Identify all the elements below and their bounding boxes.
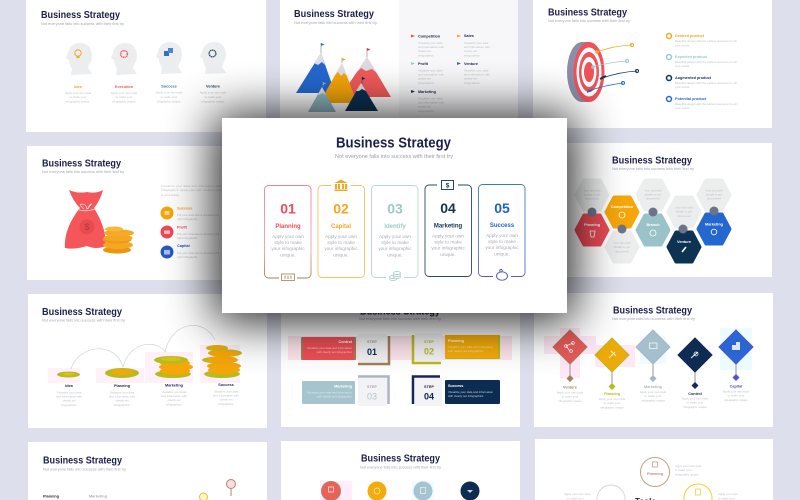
- panel: slide with head icons: [26, 0, 266, 132]
- panel: slide with coin stacks: and information with: [109, 394, 135, 398]
- panel: bottom centre slide: Business Strategy: [361, 454, 440, 464]
- panel: slide with mountains: [280, 0, 518, 118]
- panel: slide with mountains: infographics.: [464, 54, 481, 58]
- main slide drop shadow: [214, 114, 575, 322]
- panel: slide with steps: Visualize your data and information: [307, 346, 352, 350]
- panel: slide with money bag: Success: [177, 206, 192, 210]
- panel: slide with steps: Not everyone falls into success with their first try: [359, 317, 441, 321]
- panel: bottom left slide: [28, 442, 267, 500]
- panel: slide with coin stacks: Visualize your data: [214, 390, 239, 394]
- card: planning: your infographic: [271, 246, 305, 251]
- panel: slide with diamonds: to make your: [728, 394, 744, 398]
- panel: slide with mountains: clearly set: [464, 76, 477, 80]
- panel: slide with mountains: and information with: [418, 45, 444, 49]
- card: planning: Apply your own: [272, 234, 304, 239]
- panel: slide with target: Beautiful design with the perfect elements for all: [675, 81, 737, 85]
- panel: slide with mountains: Profit: [418, 62, 429, 66]
- panel: slide with hexagons: details to get: [676, 210, 692, 214]
- card: capital: Capital: [331, 224, 351, 230]
- panel: slide with target: your needs: [675, 44, 690, 48]
- panel: slide with diamonds: Not everyone falls into success with their first try: [612, 317, 695, 321]
- panel: slide with coin stacks: Visualize your data: [110, 390, 135, 394]
- panel: slide with steps: Marketing: [334, 384, 353, 388]
- panel: slide with mountains: Visualize your data: [418, 68, 443, 72]
- icon: banknote: [282, 274, 294, 280]
- panel: slide with target: your needs: [675, 64, 690, 68]
- panel: slide with hexagons: Business Strategy: [612, 156, 692, 166]
- panel: slide with mountains: Visualize your data: [464, 68, 489, 72]
- panel: slide with diamonds: Apply your own style: [640, 390, 667, 394]
- panel: slide with steps: 04: [424, 392, 434, 402]
- card: planning: [264, 186, 311, 281]
- panel: slide with hexagons: Not everyone falls into success with their first try: [612, 167, 694, 171]
- panel: slide with mountains: infographics.: [418, 81, 435, 85]
- card: planning: Planning: [275, 224, 301, 230]
- panel: slide with target: your needs: [675, 85, 690, 89]
- panel: slide with diamonds: to make your: [687, 400, 703, 404]
- panel: slide with coin stacks: Visualize your data: [57, 390, 82, 394]
- panel: slide with hexagons: discovered: [585, 196, 599, 200]
- panel: slide with coin stacks: infographics.: [61, 403, 77, 407]
- panel: slide with coin stacks: clearly set: [219, 398, 233, 402]
- panel: slide with coin stacks: [28, 294, 267, 428]
- panel: slide with diamonds: Business Strategy: [613, 306, 692, 316]
- panel: slide with head icons: Success: [161, 84, 177, 88]
- panel: slide with coin stacks: Success: [218, 383, 234, 387]
- panel: slide with diamonds: to make your: [645, 394, 661, 398]
- card: marketing: [425, 180, 472, 276]
- panel: slide with head icons: Business Strategy: [41, 10, 120, 21]
- panel: bottom left slide: Not everyone falls into success with their first try: [43, 468, 126, 472]
- card: planning: unique.: [280, 252, 296, 258]
- panel: slide with mountains: Venture: [464, 62, 478, 66]
- panel: slide with hexagons: Competition: [611, 205, 634, 209]
- panel: slide with steps: 01: [367, 347, 377, 357]
- card: planning: style to make: [274, 240, 302, 245]
- icon: dollar sign board: $: [446, 182, 450, 190]
- panel: slide with coin stacks: and information with: [56, 394, 82, 398]
- card: capital: style to make: [327, 240, 355, 245]
- panel: bottom right slide: [535, 439, 773, 500]
- panel: bottom right slide: to make your: [675, 468, 692, 472]
- card: marketing: 04: [440, 200, 456, 216]
- panel: slide with hexagons: details to get: [645, 192, 661, 196]
- panel: slide with target: Augmented product: [675, 76, 712, 80]
- panel: slide with steps: with clearly set infographics: [317, 394, 353, 398]
- panel: slide with hexagons: discovered: [646, 196, 660, 200]
- panel: slide with money bag: Profit: [177, 226, 188, 230]
- panel: slide with steps: Planning: [448, 339, 465, 343]
- panel: slide with head icons: to make your: [161, 95, 177, 99]
- panel: slide with steps: STEP: [367, 385, 377, 389]
- panel: slide with steps: with clearly set infographics: [448, 394, 484, 398]
- card: identify: 03: [387, 200, 403, 216]
- panel: slide with diamonds: Capital: [730, 384, 742, 388]
- panel: slide with coin stacks: Business Strategy: [42, 307, 122, 318]
- panel: slide with target: your needs: [675, 106, 690, 110]
- panel: slide with target: Expected product: [675, 55, 708, 59]
- panel: slide with steps: Visualize your data and information: [448, 345, 493, 349]
- card: planning: 01: [280, 200, 296, 216]
- panel: slide with diamonds: infographic unique: [683, 405, 707, 409]
- panel: slide with steps: STEP: [424, 385, 434, 389]
- panel: main slide: [222, 118, 567, 313]
- panel: slide with mountains: clearly set: [418, 76, 431, 80]
- panel: slide with steps: with clearly set infographics: [317, 350, 353, 354]
- panel: slide with mountains: infographics.: [418, 54, 435, 58]
- panel: slide with coin stacks: Idea: [65, 384, 74, 388]
- panel: slide with coin stacks: infographics.: [166, 402, 182, 406]
- panel: slide with coin stacks: and information with: [213, 394, 239, 398]
- panel: slide with coin stacks: infographics.: [114, 403, 130, 407]
- panel: slide with diamonds: Marketing: [644, 385, 663, 389]
- panel: slide with diamonds: infographic unique: [600, 406, 624, 410]
- panel: slide with mountains: and information with: [464, 45, 490, 49]
- card: success: unique.: [494, 252, 510, 256]
- panel: slide with hexagons: details to get: [614, 245, 630, 249]
- panel: slide with coin stacks: clearly set: [167, 398, 181, 402]
- card: identify: unique.: [387, 252, 403, 258]
- panel: slide with coin stacks: Not everyone falls into success with their first try: [42, 318, 125, 322]
- card: success: [478, 184, 525, 280]
- panel: bottom right slide: Planning: [647, 472, 664, 476]
- panel: slide with money bag: Put your data about choosing the: [177, 213, 220, 217]
- panel: slide with steps: [281, 300, 520, 427]
- panel: slide with head icons: Not everyone falls into success with their first try: [41, 22, 124, 26]
- panel: bottom centre slide: Not everyone falls into success with their first try: [360, 466, 441, 470]
- panel: bottom right slide: infographic unique.: [675, 472, 700, 476]
- panel: slide with hexagons: Planning: [584, 223, 601, 227]
- panel: slide with steps: Control: [338, 340, 352, 344]
- card: identify: [372, 186, 418, 281]
- icon: piggy bank: [496, 270, 508, 280]
- panel: slide with diamonds: Control: [688, 392, 702, 396]
- panel: slide with mountains: and information with: [418, 100, 444, 104]
- panel: slide with coin stacks: clearly set: [115, 398, 129, 402]
- panel: slide with mountains: Visualize your data: [418, 41, 443, 45]
- panel: slide with money bag: right infographic: [177, 217, 198, 221]
- panel: slide with diamonds: to make your: [562, 394, 578, 398]
- panel: bottom left slide: Business Strategy: [43, 456, 122, 466]
- panel: slide with mountains: and information with: [418, 72, 444, 76]
- panel: slide with target: Beautiful design with the perfect elements for all: [675, 39, 737, 43]
- panel: slide with head icons: Apply your own style: [65, 91, 92, 95]
- panel: slide with head icons: to make your: [205, 95, 221, 99]
- panel: slide with mountains: clearly set: [418, 104, 431, 108]
- panel: slide with diamonds: [534, 293, 773, 427]
- card: marketing: style to make: [434, 240, 462, 244]
- panel: slide with mountains: infographics.: [418, 109, 435, 113]
- panel: slide with mountains: Sales: [464, 34, 474, 38]
- panel: slide with money bag: Capital: [177, 244, 190, 248]
- panel: slide with hexagons: discovered: [615, 250, 629, 254]
- panel: slide with head icons: Apply your own style: [111, 91, 138, 95]
- panel: slide with steps: Visualize your data and information: [448, 390, 493, 394]
- panel: slide with head icons: Venture: [206, 84, 220, 88]
- panel: slide with steps: STEP: [424, 340, 434, 344]
- card: capital: unique.: [333, 252, 349, 258]
- card: success: Apply your own: [486, 233, 518, 238]
- panel: slide with hexagons: discovered: [707, 196, 721, 200]
- panel: slide with mountains: Marketing: [418, 90, 437, 94]
- icon: bank: [334, 180, 348, 191]
- panel: slide with head icons: infographic unique.: [201, 100, 225, 104]
- panel: slide with target: Potential product: [675, 97, 707, 101]
- panel: slide with hexagons: details to get: [584, 192, 600, 196]
- card: marketing: your infographic: [431, 246, 465, 250]
- panel: slide with hexagons: discovered: [677, 214, 691, 218]
- panel: slide with money bag: Put your data about choosing the: [177, 232, 220, 236]
- panel: slide with steps: 03: [367, 392, 377, 402]
- panel: slide with money bag: to your design.: [161, 193, 180, 197]
- panel: slide with mountains: Business Strategy: [294, 9, 374, 20]
- card: capital: your infographic: [324, 246, 358, 251]
- panel: slide with hexagons: Your text with: [705, 188, 723, 192]
- card: marketing: unique.: [440, 252, 456, 257]
- panel: slide with money bag: right infographic: [177, 255, 198, 259]
- panel: slide with head icons: Execution: [115, 85, 134, 89]
- panel: slide with target: Beautiful design with the perfect elements for all: [675, 60, 737, 64]
- panel: bottom left slide: Marketing: [89, 494, 108, 498]
- panel: bottom centre slide: [281, 441, 520, 500]
- card: capital: [318, 180, 364, 278]
- panel: slide with money bag: infographics. Apply your own creative style: [161, 188, 222, 192]
- panel: slide with target: Not everyone falls into success with their first try: [548, 19, 630, 23]
- panel: bottom left slide: Planning: [43, 494, 60, 498]
- subtitle: Not everyone falls into success with their first try: [335, 154, 453, 160]
- card: identify: your infographic: [378, 246, 412, 251]
- panel: slide with hexagons: Branch: [646, 223, 660, 227]
- panel: slide with coin stacks: Planning: [114, 384, 131, 388]
- card: capital: 02: [333, 200, 349, 216]
- panel: slide with head icons: infographic unique.: [66, 100, 90, 104]
- panel: slide with mountains: Visualize your data: [464, 41, 489, 45]
- panel: slide with head icons: Idea: [74, 85, 83, 89]
- panel: slide with target: [533, 0, 772, 128]
- panel: slide with diamonds: infographic unique: [641, 398, 665, 402]
- card: identify: Identify: [384, 224, 406, 230]
- panel: slide with coin stacks: clearly set: [62, 398, 76, 402]
- panel: slide with steps: Business Strategy: [360, 306, 440, 318]
- panel: slide with hexagons: Your text with: [675, 206, 693, 210]
- panel: slide with coin stacks: Marketing: [165, 384, 184, 388]
- panel: slide with money bag: [27, 146, 268, 280]
- icon: coins: [390, 272, 400, 280]
- panel: slide with coin stacks: Visualize your data: [162, 390, 187, 394]
- panel: slide with money bag: right infographic: [177, 236, 198, 240]
- panel: slide with diamonds: infographic unique: [724, 398, 748, 402]
- panel: slide with target: Business Strategy: [548, 8, 627, 18]
- panel: slide with diamonds: to make your: [604, 401, 620, 405]
- card: success: Success: [490, 223, 515, 229]
- panel: slide with mountains: Competition: [418, 34, 441, 38]
- panel: slide with mountains: clearly set: [418, 49, 431, 53]
- panel: slide with hexagons: details to get: [706, 192, 722, 196]
- panel: slide with mountains: clearly set: [464, 49, 477, 53]
- panel: slide with coin stacks: and information with: [161, 394, 187, 398]
- panel: slide with steps: Success: [448, 384, 463, 388]
- panel: slide with head icons: to make your: [70, 95, 86, 99]
- panel: slide with steps: 02: [424, 346, 434, 356]
- card: success: your infographic: [485, 245, 519, 250]
- title: Business Strategy: [336, 134, 452, 152]
- panel: slide with money bag: Put your data about choosing the: [177, 251, 220, 255]
- panel: slide with hexagons: [567, 143, 772, 277]
- card: marketing: Marketing: [434, 224, 463, 230]
- panel: slide with head icons: infographic unique.: [157, 100, 181, 104]
- panel: slide with diamonds: infographic unique: [558, 399, 582, 403]
- panel: slide with mountains: Visualize your data: [418, 96, 443, 100]
- panel: slide with diamonds: Apply your own style: [723, 390, 750, 394]
- panel: bottom right slide: Apply your own: [718, 492, 738, 496]
- panel: bottom right slide: Apply your own style: [564, 492, 591, 496]
- panel: slide with head icons: Apply your own style: [200, 90, 227, 94]
- panel: slide with head icons: infographic unique.: [112, 100, 136, 104]
- panel: slide with diamonds: Venture: [563, 386, 577, 390]
- card: capital: Apply your own: [325, 234, 357, 239]
- panel: slide with diamonds: Apply your own style: [682, 396, 709, 400]
- panel: slide with mountains: and information with: [464, 72, 490, 76]
- panel: slide with hexagons: Venture: [677, 240, 691, 244]
- panel: slide with hexagons: Your text with: [583, 188, 601, 192]
- panel: slide with money bag: Not everyone falls into success with their first try: [42, 170, 124, 174]
- panel: slide with diamonds: Apply your own style: [599, 397, 626, 401]
- panel: slide with diamonds: Apply your own style: [557, 390, 584, 394]
- panel: slide with coin stacks: infographics.: [218, 402, 234, 406]
- card: identify: style to make: [381, 240, 409, 245]
- card: identify: Apply your own: [379, 234, 411, 239]
- panel: slide with hexagons: Your text with: [644, 188, 662, 192]
- panel: slide with target: Beautiful design with the perfect elements for all: [675, 102, 737, 106]
- card: marketing: Apply your own: [432, 234, 464, 238]
- panel: slide with head icons: to make your: [116, 95, 132, 99]
- panel: slide with steps: with clearly set infographics: [448, 349, 484, 353]
- panel: bottom right slide: Apply your own style: [675, 464, 702, 468]
- panel: slide with diamonds: Planning: [604, 392, 621, 396]
- panel: slide with target: Desired product: [675, 34, 705, 38]
- panel: slide with mountains: Not everyone falls into success with their first try: [294, 21, 377, 25]
- panel: slide with hexagons: Marketing: [705, 222, 724, 226]
- panel: slide with head icons: Apply your own style: [156, 90, 183, 94]
- panel: slide with money bag: Business Strategy: [42, 158, 121, 170]
- panel: slide with mountains: infographics.: [464, 81, 481, 85]
- panel: slide with hexagons: Your text with: [613, 241, 631, 245]
- panel: slide with steps: STEP: [367, 340, 377, 344]
- panel: slide with money bag: $: [84, 222, 90, 232]
- card: success: 05: [494, 200, 510, 216]
- panel: slide with steps: Visualize your data and information: [307, 390, 352, 394]
- panel: slide with money bag: Visualize your data and information with: [161, 184, 222, 188]
- card: success: style to make: [488, 239, 516, 244]
